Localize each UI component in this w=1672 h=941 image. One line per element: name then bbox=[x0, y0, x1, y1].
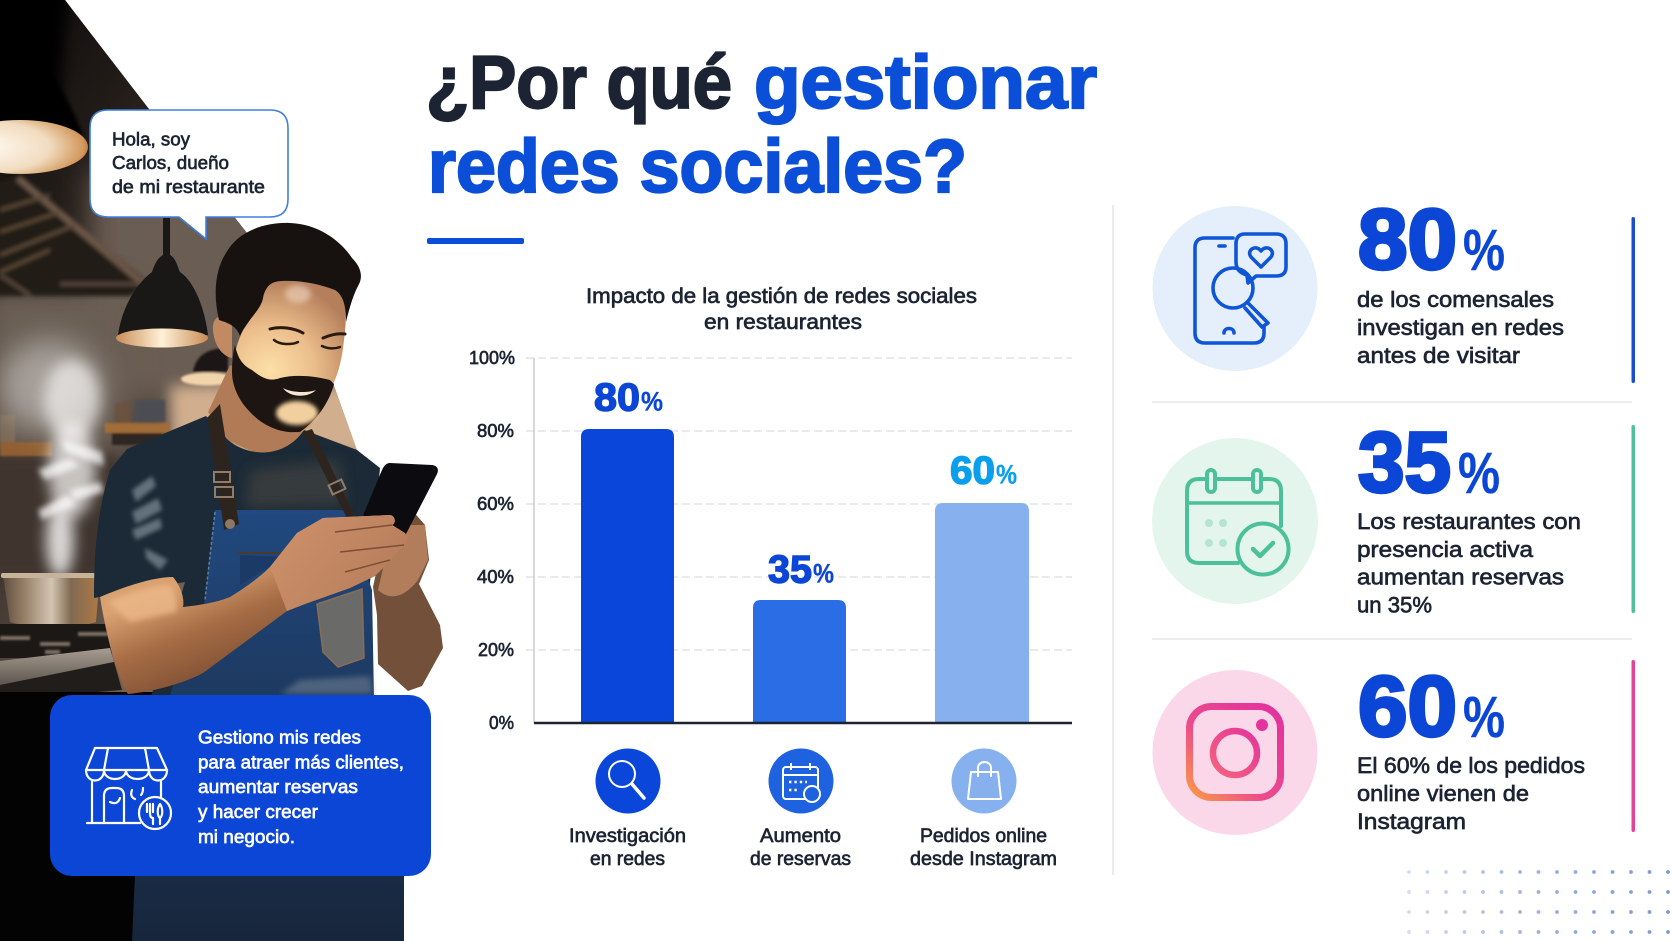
value: % bbox=[1458, 441, 1500, 506]
bar chart bbox=[469, 285, 1072, 870]
value: 60%: % bbox=[996, 460, 1017, 490]
description bbox=[1357, 509, 1581, 618]
speech bubble: Hola, soy bbox=[112, 128, 191, 150]
category labels: Aumento bbox=[760, 826, 841, 847]
y-axis labels: 100% bbox=[469, 348, 515, 368]
value: 80%: 80 bbox=[594, 376, 640, 420]
smile bbox=[283, 388, 316, 396]
title bbox=[426, 40, 1097, 208]
y-axis labels: 20% bbox=[478, 640, 514, 660]
icon: phone with search and heart bbox=[1152, 206, 1318, 371]
y-axis labels: 80% bbox=[477, 421, 514, 441]
stove bbox=[0, 624, 112, 658]
finger lines bbox=[335, 525, 404, 572]
category labels: desde Instagram bbox=[910, 849, 1057, 870]
bar: 80% bbox=[581, 429, 674, 723]
beard bbox=[232, 345, 334, 432]
title: redes sociales? bbox=[428, 124, 967, 208]
photo: kitchen background bbox=[0, 0, 357, 941]
chin patch bbox=[276, 401, 318, 425]
description: un 35% bbox=[1357, 592, 1432, 618]
value: 35%: 35 bbox=[768, 548, 812, 592]
icon: instagram bbox=[1152, 670, 1318, 835]
hair bbox=[216, 223, 361, 336]
value: 80% bbox=[594, 376, 663, 420]
description bbox=[1357, 287, 1564, 368]
y-axis labels: 0% bbox=[489, 713, 514, 733]
title: gestionar bbox=[754, 40, 1097, 124]
callout: owner message card: y hacer crecer bbox=[198, 801, 318, 822]
icon: shopping bag bbox=[952, 748, 1016, 814]
icon: calendar with check bbox=[1152, 438, 1318, 604]
neck bbox=[208, 365, 306, 456]
icon: calendar bbox=[768, 748, 834, 814]
chart title: en restaurantes bbox=[704, 311, 862, 334]
callout: owner message card: para atraer más clientes, bbox=[198, 752, 404, 772]
chart title bbox=[586, 285, 977, 334]
face bbox=[233, 273, 346, 433]
callout: owner message card: mi negocio. bbox=[198, 826, 295, 847]
value: 35% bbox=[768, 548, 834, 592]
value: 80%: % bbox=[641, 386, 663, 416]
description: El 60% de los pedidos bbox=[1357, 753, 1585, 778]
speech bubble bbox=[90, 110, 288, 239]
description: investigan en redes bbox=[1357, 315, 1564, 340]
apron bbox=[132, 510, 404, 941]
callout: owner message card: Gestiono mis redes bbox=[198, 726, 361, 748]
far forearm and hand bbox=[373, 510, 443, 691]
value bbox=[1358, 192, 1505, 288]
description: online vienen de bbox=[1357, 781, 1529, 806]
description bbox=[1357, 753, 1585, 834]
extractor hood bbox=[0, 176, 150, 296]
title underline bbox=[427, 238, 524, 244]
left strap bbox=[207, 404, 239, 530]
y-axis labels bbox=[469, 348, 515, 733]
lamp centre bbox=[116, 218, 208, 348]
speech bubble: Carlos, dueño bbox=[112, 152, 229, 173]
t-shirt bbox=[94, 416, 380, 700]
right strap bbox=[303, 429, 354, 518]
shelves bbox=[0, 400, 170, 456]
bar: 35% bbox=[753, 600, 846, 723]
value: % bbox=[1463, 218, 1505, 283]
value: 35%: % bbox=[813, 558, 834, 588]
steam bbox=[0, 340, 104, 578]
chart title: Impacto de la gestión de redes sociales bbox=[586, 285, 977, 308]
phone bbox=[358, 463, 438, 541]
y-axis labels: 60% bbox=[477, 494, 514, 514]
bar: 60% bbox=[935, 503, 1029, 723]
value: 60 bbox=[1358, 660, 1457, 754]
description: antes de visitar bbox=[1357, 343, 1520, 368]
callout: owner message card bbox=[50, 695, 431, 876]
category labels: de reservas bbox=[750, 849, 851, 870]
callout: owner message card: aumentar reservas bbox=[198, 776, 358, 797]
panel: stat 60% bbox=[1152, 660, 1635, 835]
panel: stat 35% bbox=[1152, 416, 1635, 618]
description: aumentan reservas bbox=[1357, 564, 1564, 590]
near forearm and upper arm bbox=[100, 515, 407, 694]
value bbox=[1358, 660, 1505, 754]
apron leather pocket bbox=[317, 589, 364, 667]
value: % bbox=[1463, 685, 1505, 750]
category labels: en redes bbox=[590, 849, 665, 870]
pot bbox=[1, 573, 101, 626]
ear bbox=[213, 316, 232, 358]
description: Los restaurantes con bbox=[1357, 509, 1581, 534]
forehead highlight bbox=[285, 285, 311, 303]
title: ¿Por qué bbox=[426, 40, 732, 124]
lamp left bbox=[0, 88, 88, 174]
value bbox=[1358, 416, 1500, 510]
speech bubble: de mi restaurante bbox=[112, 176, 265, 197]
lamp back bbox=[181, 348, 235, 386]
value: 35 bbox=[1358, 416, 1451, 510]
photo: man with phone bbox=[94, 223, 443, 941]
value: 80 bbox=[1358, 192, 1457, 288]
description: presencia activa bbox=[1357, 537, 1534, 562]
y-axis labels: 40% bbox=[477, 567, 514, 587]
arm highlight bbox=[108, 585, 177, 622]
category labels bbox=[569, 826, 1057, 870]
eyes and brows bbox=[270, 328, 345, 348]
panel: stat 80% bbox=[1152, 192, 1635, 383]
description: de los comensales bbox=[1357, 287, 1554, 312]
near hand bbox=[270, 515, 407, 611]
value: 60%: 60 bbox=[950, 450, 995, 492]
category labels: Investigación bbox=[569, 826, 686, 847]
category labels: Pedidos online bbox=[920, 826, 1047, 847]
value: 60% bbox=[950, 450, 1017, 492]
icon: search bbox=[596, 748, 660, 814]
counter bbox=[0, 648, 114, 685]
icon: restaurant store bbox=[86, 748, 171, 829]
description: Instagram bbox=[1357, 809, 1466, 834]
